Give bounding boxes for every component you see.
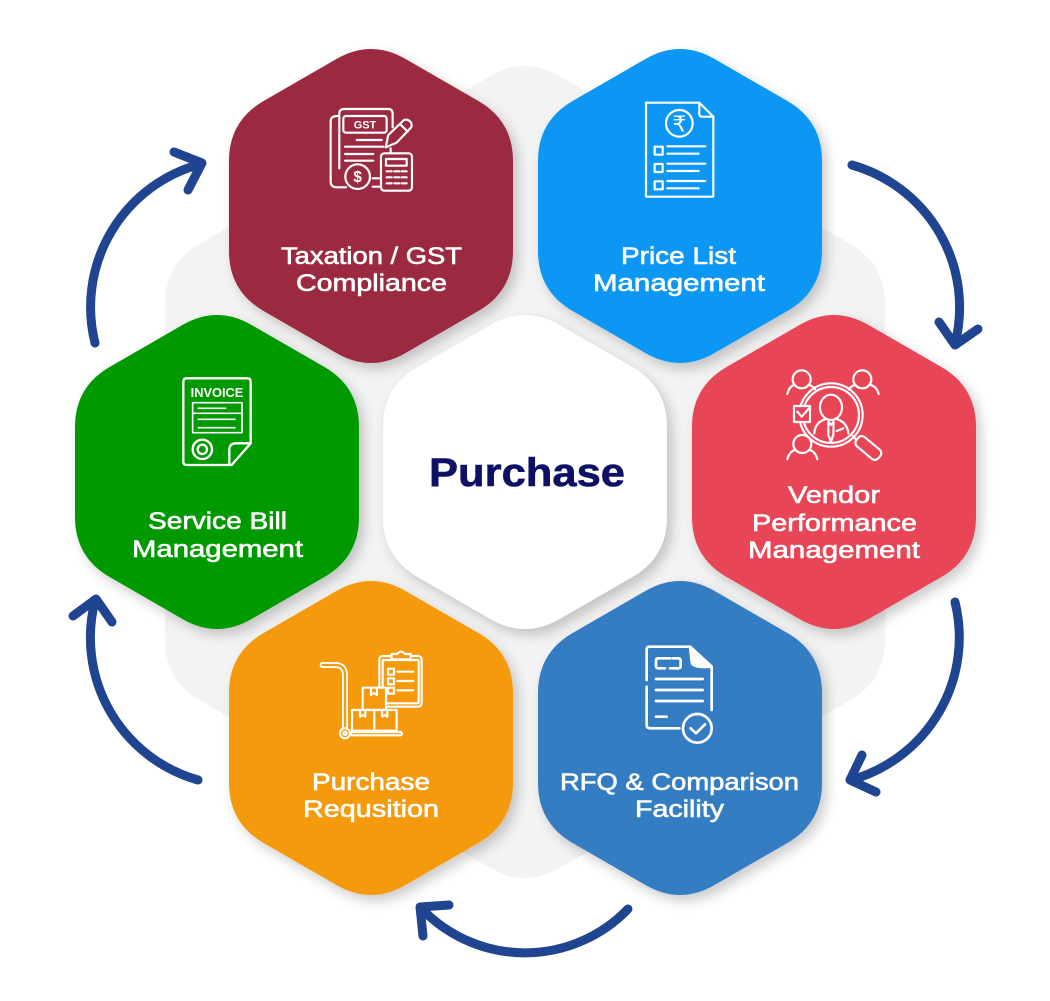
label: Vendor (788, 482, 880, 509)
label: Management (132, 536, 303, 563)
arrow: upper left (91, 152, 202, 343)
icon: invoice (183, 378, 251, 465)
icon: rupee price list: ₹ (672, 112, 686, 137)
label (303, 769, 439, 823)
title: Purchase (429, 451, 625, 495)
panel: Purchase Requsition (229, 581, 513, 895)
icon: RFQ document with check (647, 647, 712, 743)
label: Requsition (303, 796, 439, 823)
panel: Taxation / GST Compliance (229, 49, 513, 363)
icon: invoice: INVOICE (191, 385, 244, 400)
arrow: lower left (73, 599, 198, 780)
panel: center Purchase (383, 315, 667, 629)
label: Purchase (312, 769, 430, 796)
icon: GST document and calculator: GST (354, 120, 377, 132)
icon: rupee price list (646, 103, 713, 197)
label: Taxation / GST (281, 243, 462, 270)
label: Facility (635, 796, 724, 823)
label: RFQ & Comparison (560, 769, 799, 796)
arrow: bottom (420, 905, 628, 953)
label (132, 508, 303, 563)
label: Service Bill (148, 508, 287, 535)
label (593, 243, 765, 297)
panel: Vendor Performance Management (692, 315, 976, 629)
label: Management (748, 537, 920, 564)
label (281, 243, 462, 297)
panel: Service Bill Management (75, 315, 359, 629)
label (560, 769, 799, 823)
icon: GST document and calculator: $ (353, 169, 362, 186)
arrow: right (850, 602, 959, 792)
panel: Price List Management (538, 49, 822, 363)
label (748, 482, 920, 564)
icon: trolley and clipboard (323, 652, 422, 738)
label: Compliance (296, 270, 447, 297)
panel: RFQ & Comparison Facility (538, 581, 822, 895)
label: Performance (752, 510, 917, 537)
label: Price List (621, 243, 736, 270)
icon: GST document and calculator (331, 109, 412, 191)
arrow: top right (852, 165, 978, 345)
icon: vendor search (787, 370, 883, 462)
label: Management (593, 270, 765, 297)
background hexagon (165, 66, 885, 878)
